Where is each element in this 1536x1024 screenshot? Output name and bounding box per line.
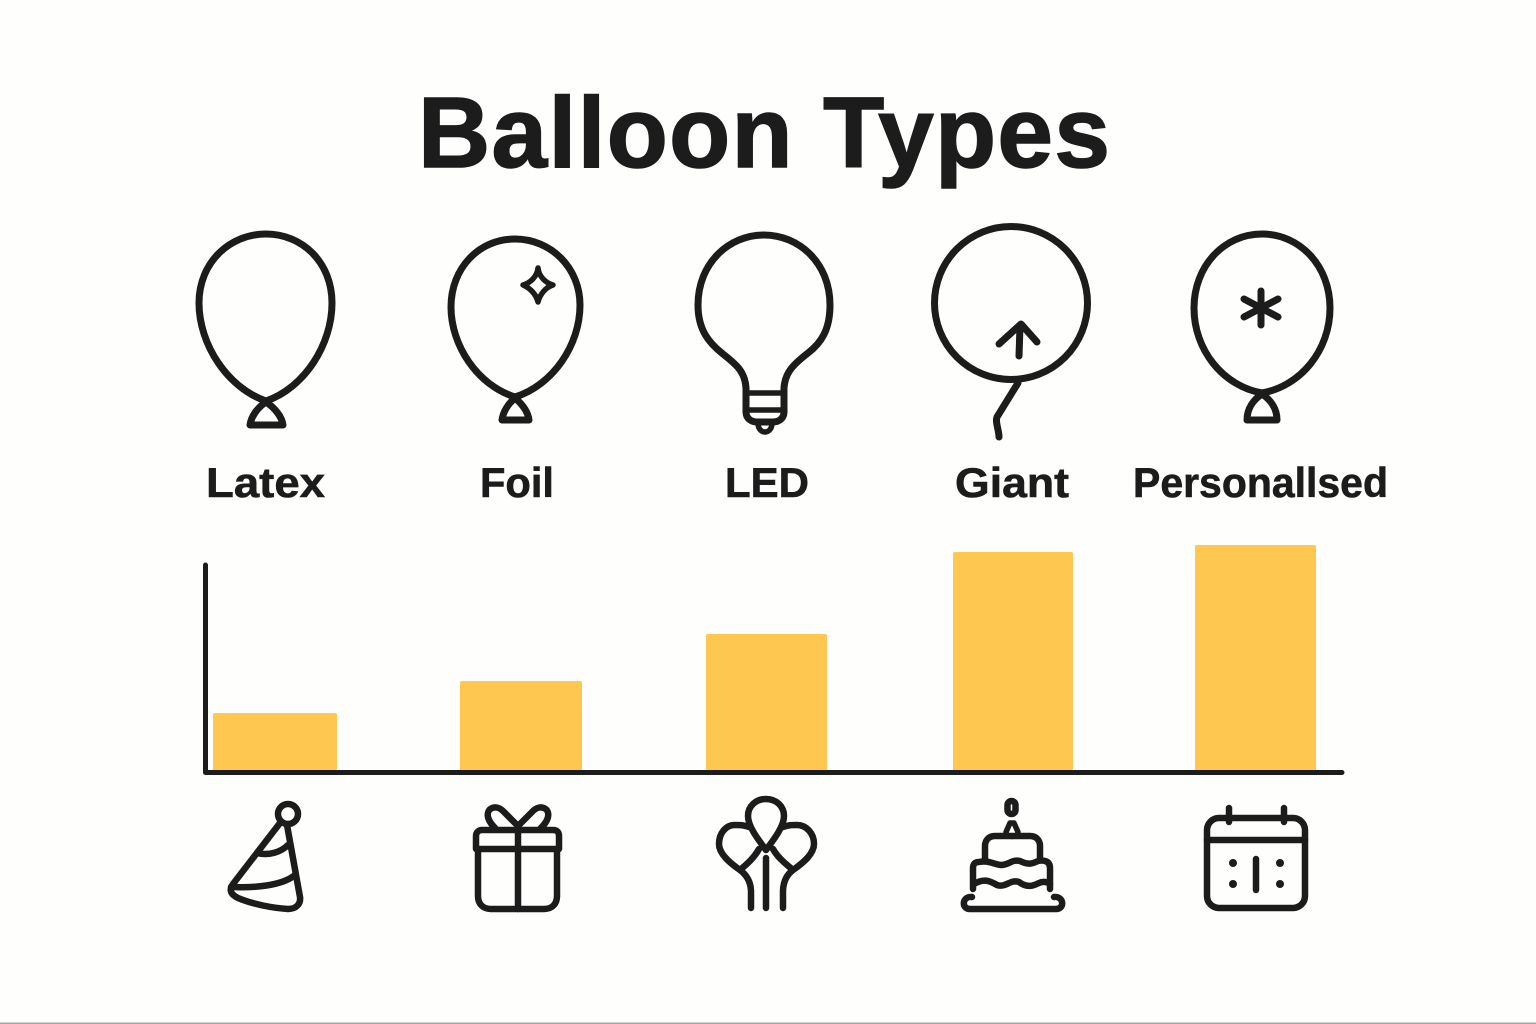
title: Balloon Types: [418, 77, 1110, 189]
icon: balloon bunch: [719, 799, 814, 908]
label: LED: LED: [725, 459, 809, 506]
icon: foil balloon: [451, 239, 580, 420]
label: Latex: Latex: [206, 459, 326, 506]
bar: Giant: [953, 552, 1073, 771]
icon: giant arrow: [999, 324, 1037, 356]
bar: Foil: [460, 681, 582, 771]
icon: giant balloon: [934, 226, 1088, 437]
icon: LED bulb balloon: [698, 235, 830, 432]
label: Giant: Giant: [955, 459, 1069, 506]
icon: gift box: [476, 807, 559, 909]
icon: asterisk: [1244, 291, 1278, 325]
icon: foil sparkle: [523, 268, 553, 302]
bar chart: [206, 545, 1342, 772]
bar: LED: [706, 634, 827, 771]
icon: calendar: [1207, 808, 1305, 908]
bar: Latex: [213, 713, 337, 771]
icon: party hat: [231, 804, 300, 909]
bar: Personallsed: [1195, 545, 1316, 771]
icon: personalised balloon: [1194, 234, 1330, 420]
icon: birthday cake: [964, 801, 1062, 909]
chart axes: [206, 565, 1342, 772]
icon: latex balloon: [199, 234, 332, 425]
label: Foil: Foil: [480, 459, 554, 506]
label: Personallsed: Personallsed: [1133, 459, 1388, 506]
